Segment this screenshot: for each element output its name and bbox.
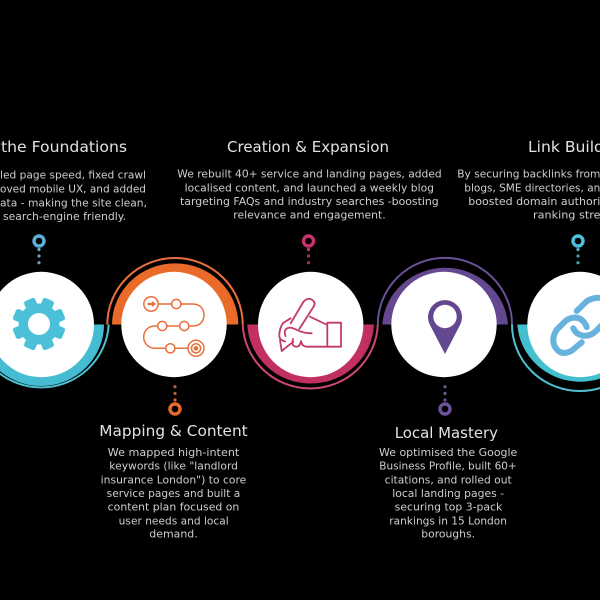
- step 4: local mastery heading: Local Mastery: [395, 424, 498, 442]
- step 5: description: boosted domain authori: [468, 196, 600, 208]
- step 4: description: rankings in 15 London: [389, 515, 507, 527]
- step 4: description: securing top 3-pack: [395, 502, 503, 514]
- step 4: description: Business Profile, built 60+: [379, 460, 517, 472]
- step 2: description: demand.: [149, 529, 198, 541]
- step 4: description: We optimised the Google: [379, 447, 517, 459]
- step 3: arc: [243, 324, 378, 388]
- step 5: description: blogs, SME directories, an: [464, 182, 600, 194]
- step 5: white disc: [527, 272, 600, 377]
- step 1: arc: [0, 324, 109, 387]
- step 1: description: led page speed, fixed crawl: [0, 170, 146, 182]
- step 1: description: oved mobile UX, and added: [0, 184, 146, 196]
- icon: chain link: [553, 298, 600, 353]
- step 2: description: keywords (like "landlord: [109, 460, 238, 472]
- step 1: connector: [34, 236, 44, 264]
- icon: gear: [12, 297, 66, 351]
- step 3: description: localised content, and launched a weekly blog: [185, 182, 434, 194]
- icon: map pin: [428, 300, 462, 354]
- step 2: description: We mapped high-intent: [108, 447, 239, 459]
- step 3: description: relevance and engagement.: [233, 210, 386, 222]
- step 2: arc: [107, 258, 243, 324]
- icon: hand writing with pen: [279, 299, 341, 351]
- step 3: description: [177, 169, 442, 222]
- step 2: description: service pages and built a: [107, 488, 240, 500]
- step 3: creation and expansion heading: Creation & Expansion: [227, 138, 389, 156]
- step 4: description: citations, and rolled out: [385, 474, 512, 486]
- step 5: description: [457, 169, 600, 222]
- step 2: mapping and content heading: Mapping & Content: [99, 422, 248, 440]
- step 1: white disc: [0, 272, 94, 377]
- step 5: description: By securing backlinks from: [457, 169, 600, 181]
- step 2: description: [101, 447, 246, 541]
- step 2: description: insurance London") to core: [101, 474, 246, 486]
- step 1: description: search-engine friendly.: [3, 211, 126, 223]
- step 1: description: ata - making the site clean,: [0, 198, 147, 210]
- step 3: description: We rebuilt 40+ service and landing pages, added: [177, 169, 442, 181]
- step 5: arc: [512, 324, 600, 391]
- step 4: arc: [378, 258, 512, 324]
- step 3: white disc: [258, 272, 363, 377]
- step 2: description: content plan focused on: [108, 502, 239, 514]
- step 2: white disc: [121, 272, 227, 377]
- icon: roadmap path: [144, 297, 204, 356]
- step 4: description: boroughs.: [421, 529, 475, 541]
- step 3: connector: [304, 236, 314, 264]
- step 4: white disc: [391, 272, 497, 377]
- step 4: description: local landing pages -: [392, 488, 504, 500]
- step 5: description: ranking stre: [533, 210, 600, 222]
- step 5: connector: [573, 236, 583, 264]
- step 4: connector: [440, 385, 450, 414]
- step 2: connector: [170, 385, 180, 414]
- step 2: description: user needs and local: [119, 515, 229, 527]
- step 3: description: targeting FAQs and industry searches -boosting: [180, 196, 439, 208]
- step 1: the foundations heading: the Foundations: [1, 138, 127, 156]
- step 1: description: [0, 170, 147, 223]
- step 4: description: [379, 447, 517, 541]
